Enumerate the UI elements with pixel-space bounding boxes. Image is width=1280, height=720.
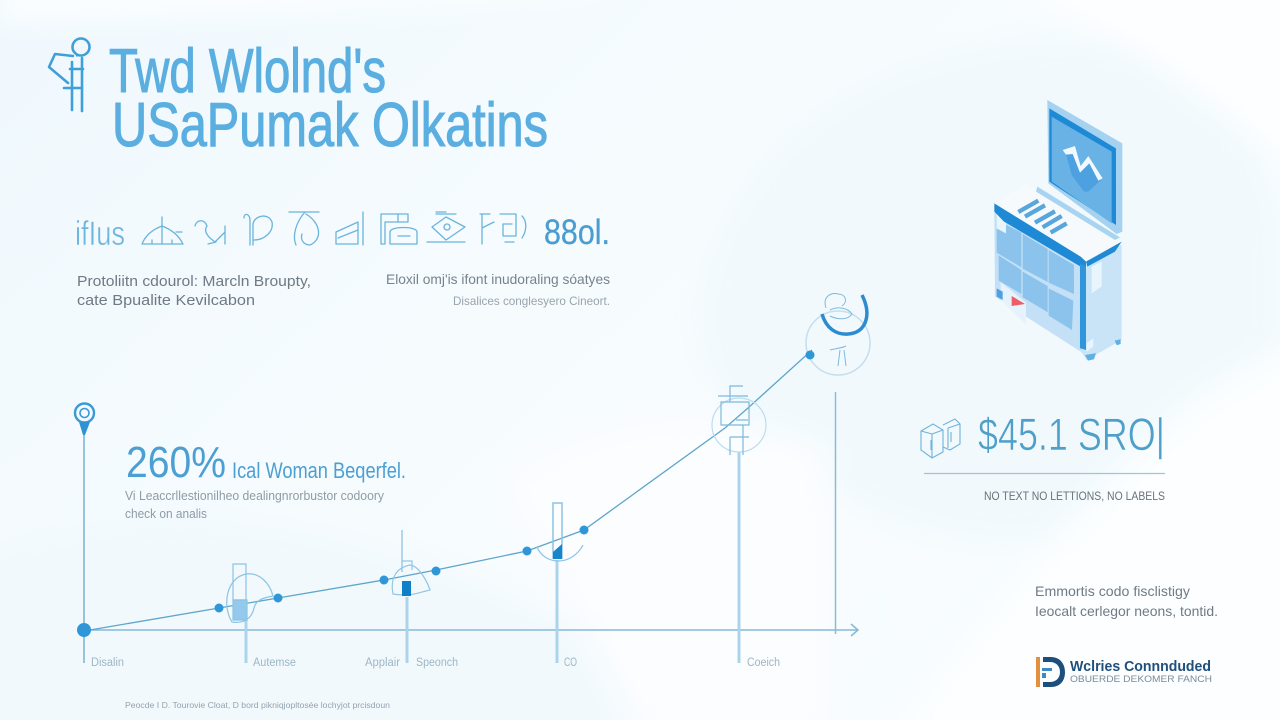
chart: growth line <box>75 294 870 669</box>
icon row <box>75 212 610 253</box>
stat: 260% headline: 260% <box>126 438 226 487</box>
axis labels: Coeich <box>747 657 780 669</box>
icon row value: 88ol. <box>544 213 610 252</box>
window grid <box>997 220 1074 330</box>
axis labels: Autemse <box>253 657 296 669</box>
title <box>109 37 548 160</box>
trend line <box>90 350 812 630</box>
text block: left description <box>77 273 311 309</box>
front blue edge <box>994 203 1086 269</box>
title: USaPumak Olkatins <box>112 91 548 160</box>
panel lid <box>1047 100 1122 234</box>
text block: left description: Protoliitn cdourol: Marcln Broupty, <box>77 273 311 290</box>
text block: right description: Eloxil omj'is ifont inudoraling sóatyes <box>386 271 610 287</box>
logo tagline: OBUERDE DEKOMER FANCH <box>1070 674 1212 685</box>
caption: NO TEXT NO LETTIONS, NO LABELS <box>984 489 1165 503</box>
right marker line <box>834 392 836 634</box>
text block: right description: Disalices conglesyero Cineort. <box>453 294 610 308</box>
y axis with marker <box>75 404 94 663</box>
stat: 260% headline <box>126 438 406 487</box>
icon: figure five <box>806 294 870 375</box>
icon: climbing figure <box>49 38 90 111</box>
icon: test tube one <box>227 564 273 622</box>
logo mark <box>1036 657 1065 687</box>
text block: lower right: Ieocalt cerlegor neons, tontid. <box>1035 603 1218 619</box>
text block: left description: cate Bpualite Kevilcabon <box>77 292 255 309</box>
icon: stacked boxes <box>921 419 960 458</box>
vent slats <box>1018 201 1067 233</box>
side face <box>1080 245 1122 360</box>
axis labels: Speonch <box>416 657 458 669</box>
data points <box>77 350 814 637</box>
text block: stat description: check on analis <box>125 507 207 521</box>
stat: dollar value <box>921 409 1165 460</box>
axis labels <box>91 657 780 669</box>
footnote: Peocde I D. Tourovie Cloat, D bord pikniqjopltosée lochyjot prcisdoun <box>125 700 390 710</box>
warning flag <box>1012 296 1025 306</box>
value: $45.1 SRO| <box>978 409 1165 460</box>
text block: right description <box>386 271 610 308</box>
text block: stat description: Vi Leaccrllestionilheo dealingnrorbustor codoory <box>125 489 385 503</box>
stat: 260% headline: Ical Woman Beqerfel. <box>232 458 406 483</box>
axis labels: Disalin <box>91 657 124 669</box>
text block: stat description <box>125 489 385 521</box>
icon row label: ifIus <box>75 215 125 253</box>
icon: test tube three <box>537 503 583 561</box>
text block: lower right <box>1035 583 1218 619</box>
icon: machine four <box>712 386 766 455</box>
value columns <box>246 452 739 663</box>
illustration: isometric server with open panel <box>994 100 1122 361</box>
top surface <box>996 183 1122 262</box>
axis labels: Applair <box>365 657 400 669</box>
x axis <box>84 624 858 636</box>
text block: lower right: Emmortis codo fisclistigy <box>1035 583 1190 599</box>
icon: device two <box>392 530 430 596</box>
logo <box>1036 657 1212 687</box>
line icons <box>142 212 526 245</box>
divider rule <box>924 472 1165 474</box>
logo name: Wclries Connnduded <box>1070 659 1211 675</box>
axis labels: CO <box>564 657 577 669</box>
front face <box>994 212 1081 352</box>
title: Twd Wlolnd's <box>109 37 386 106</box>
